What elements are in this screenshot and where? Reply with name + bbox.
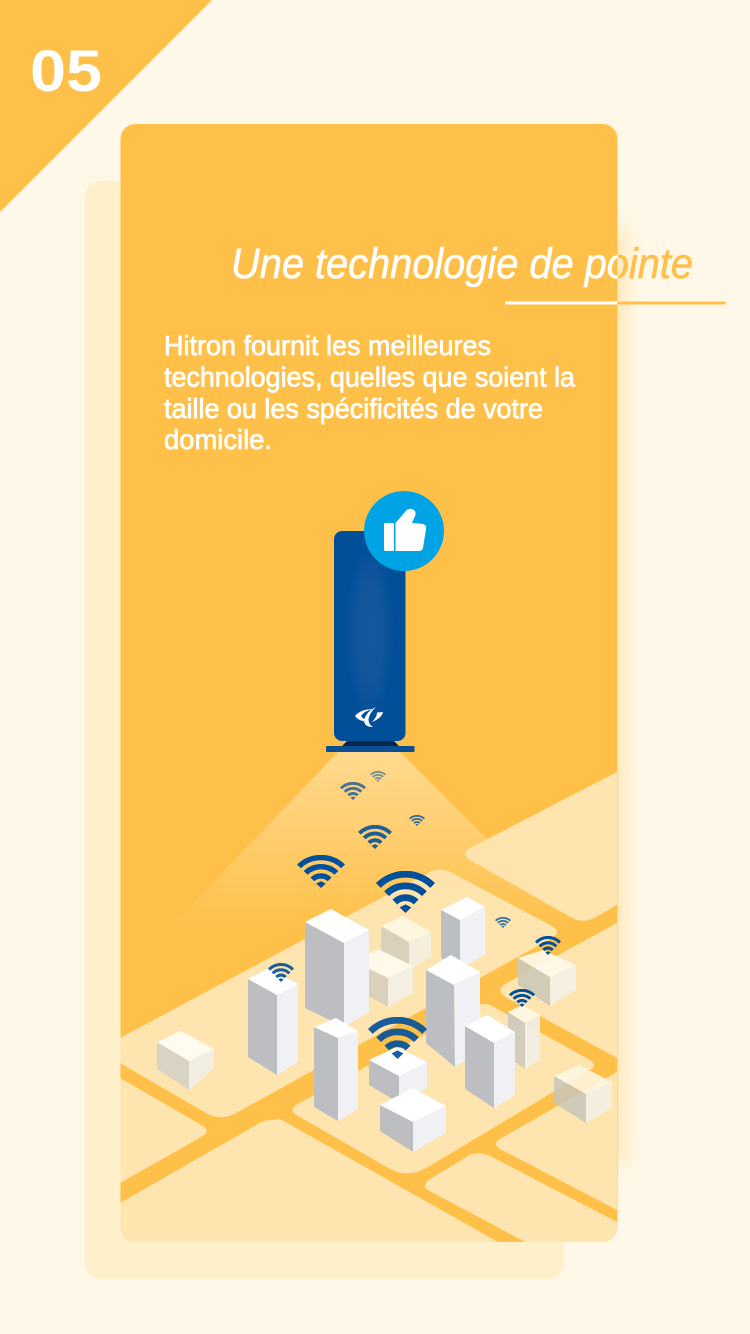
wifi icon 2 xyxy=(341,783,365,800)
city ground xyxy=(120,772,617,1242)
wifi icon 6 xyxy=(378,874,433,913)
card soft shadow xyxy=(595,228,625,1163)
wifi signals xyxy=(269,772,560,1059)
icon: thumbs up badge xyxy=(364,491,444,571)
router body xyxy=(334,531,406,741)
building: middle cream cube xyxy=(353,949,413,1007)
wifi icon 1 xyxy=(371,772,385,782)
building: front white cube xyxy=(380,1088,446,1152)
wifi icon 3 xyxy=(410,816,424,826)
building: slim translucent tower xyxy=(508,1005,540,1069)
body text: Hitron fournit les meilleures xyxy=(164,330,491,361)
main card xyxy=(120,124,618,1242)
router stand xyxy=(342,741,399,746)
corner triangle xyxy=(0,0,212,212)
building: front tower xyxy=(314,1018,358,1121)
step number: 05 xyxy=(30,39,102,104)
building: left tower xyxy=(248,968,298,1075)
router glow xyxy=(346,544,394,720)
wifi icon 7 xyxy=(496,918,510,928)
building: right translucent cube xyxy=(554,1065,612,1123)
wifi icon 4 xyxy=(359,827,391,849)
title underline xyxy=(505,302,726,304)
wifi icon 10 xyxy=(510,990,534,1007)
router device xyxy=(326,531,414,752)
body text: technologies, quelles que soient la xyxy=(164,362,575,392)
back card xyxy=(85,181,564,1279)
body text: domicile. xyxy=(164,424,272,455)
wifi icon 9 xyxy=(269,964,293,982)
building: right tower xyxy=(465,1015,515,1108)
building: tallest tower xyxy=(305,909,369,1027)
wifi icon 5 xyxy=(299,858,343,888)
wifi icon 8 xyxy=(536,937,560,955)
building: right cream cube xyxy=(518,950,576,1006)
building: back cream cube xyxy=(381,916,431,970)
building: centre right tower xyxy=(426,955,480,1067)
router base xyxy=(326,746,414,752)
body text: taille ou les spécificités de votre xyxy=(164,393,543,424)
router logo xyxy=(355,707,383,727)
title: Une technologie de pointe xyxy=(231,240,693,288)
light beam xyxy=(168,752,578,930)
wifi icon 11 xyxy=(370,1020,425,1059)
building: white cube xyxy=(369,1047,427,1103)
building: back right tower xyxy=(441,897,485,968)
building: left cream cube xyxy=(157,1031,214,1090)
body text xyxy=(164,330,575,455)
